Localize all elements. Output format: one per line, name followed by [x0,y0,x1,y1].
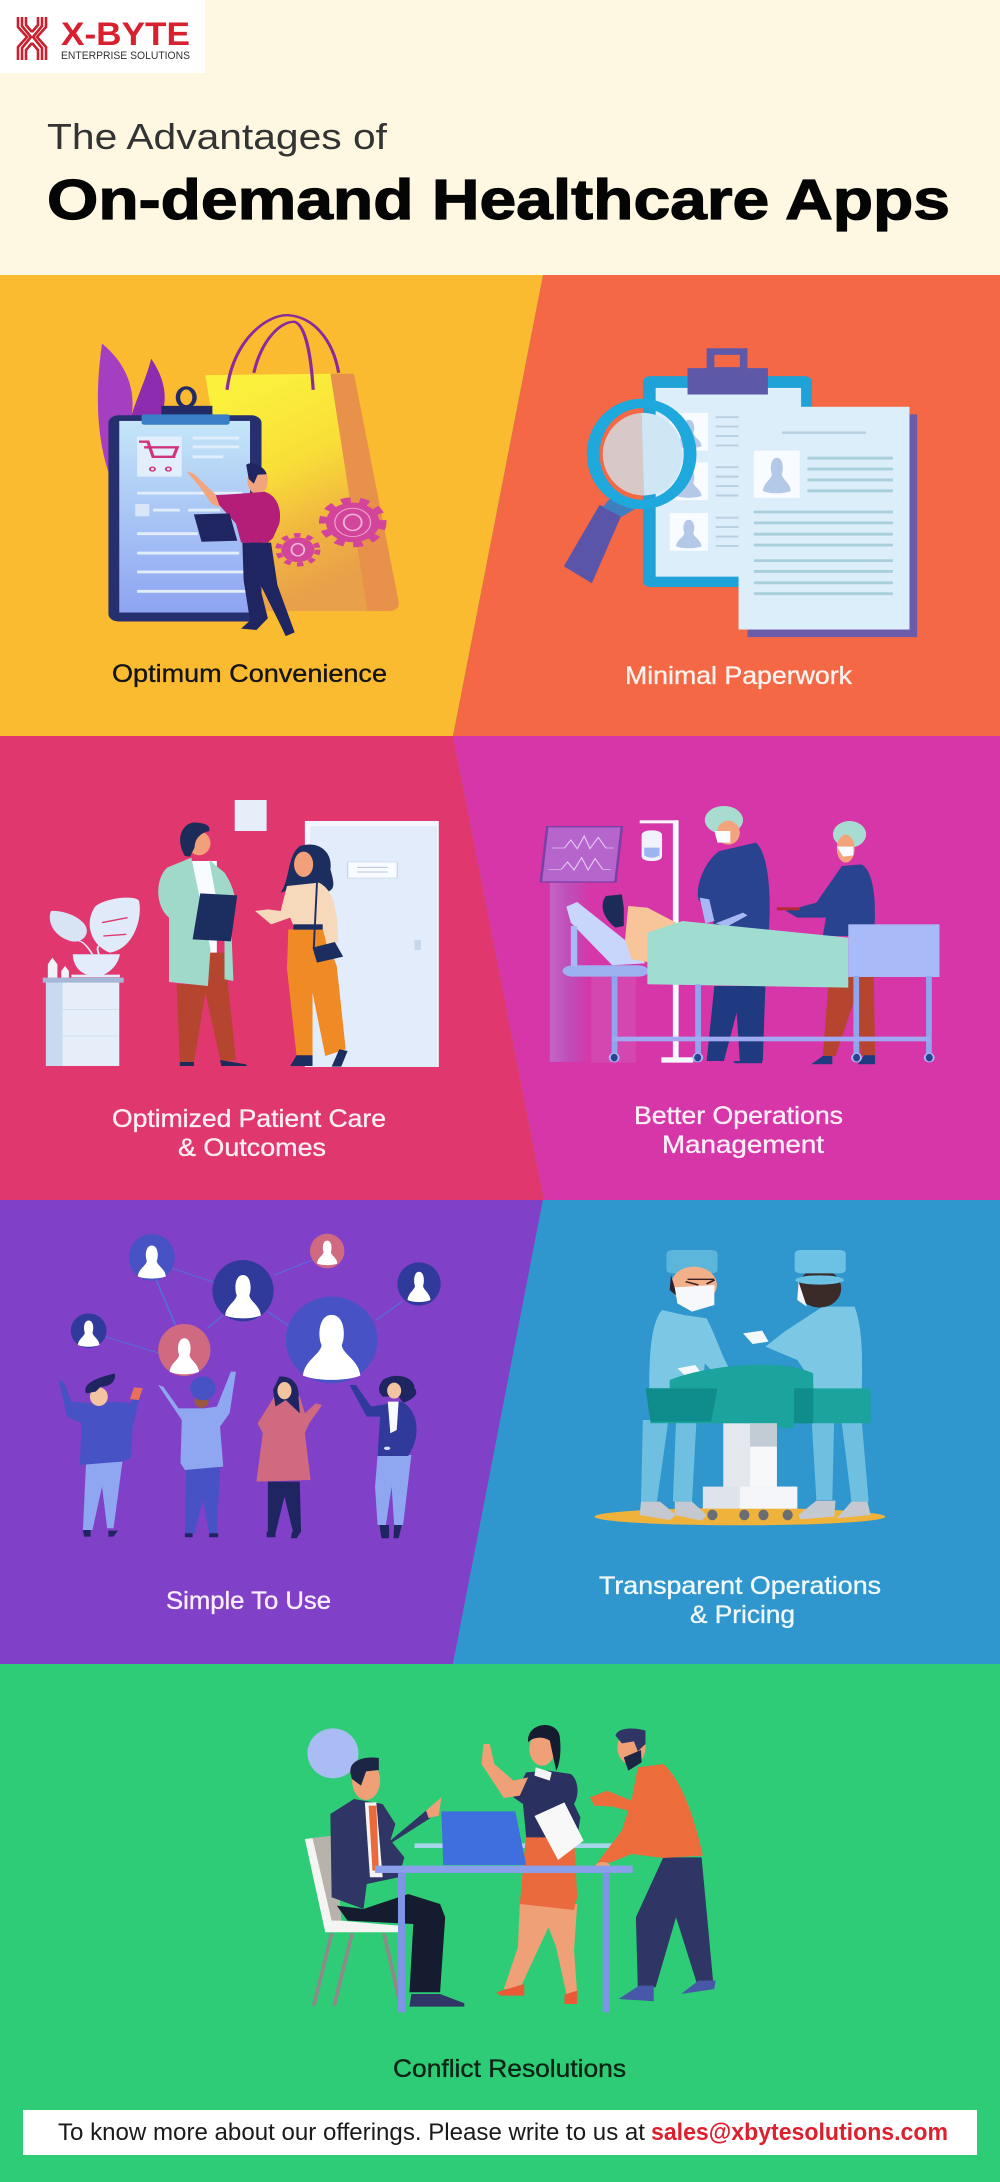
panel: conflict resolutions [0,1664,1000,2182]
table [670,1365,813,1388]
label: optimized patient care: & Outcomes [178,1134,326,1162]
illustration: doctor and patient [43,800,439,1067]
illustration: team meeting [305,1725,716,2012]
illustration: shopping bag and clipboard [98,315,399,636]
panel: better operations [453,736,1000,1200]
surgeon left [707,986,765,1061]
panel: minimal paperwork [453,275,1000,736]
seated man [337,1894,445,1992]
bearded man [636,1857,713,1987]
person 1 [83,1462,122,1530]
illustration: operating room [541,806,939,1064]
label: better operations: Management [662,1131,824,1159]
label: conflict resolutions: Conflict Resolutions [393,2055,626,2083]
bed [563,965,649,977]
label: better operations [634,1102,843,1159]
illustration: surgeons at table [594,1250,885,1525]
title [47,116,950,232]
label: transparent operations: & Pricing [690,1601,795,1629]
label: transparent operations [599,1572,881,1629]
surgeon right [823,976,875,1056]
label: transparent operations: Transparent Operations [599,1572,881,1600]
illustration: documents and magnifier [564,348,917,637]
panel: optimum convenience [0,275,543,736]
title: On-demand Healthcare Apps [47,168,950,232]
label: optimized patient care [112,1105,386,1162]
label: optimum convenience: Optimum Convenience [112,660,387,688]
logo: ENTERPRISE SOLUTIONS [61,50,190,62]
title: The Advantages of [47,116,388,157]
label: optimized patient care: Optimized Patient Care [112,1105,386,1133]
desk [375,1866,633,1873]
doctor [188,831,210,855]
woman [281,845,333,893]
panel: optimized patient care [0,736,544,1200]
contact bar: To know more about our offerings. Please write to us at [58,2119,645,2146]
illustration: people network [59,1234,441,1538]
surgeon right [811,1413,869,1502]
contact bar: sales@xbytesolutions.com [651,2119,948,2146]
person 3 [268,1482,301,1533]
label: simple to use: Simple To Use [166,1587,331,1615]
label: minimal paperwork: Minimal Paperwork [625,662,853,690]
person 4 [375,1455,411,1525]
surgeon left [641,1420,696,1502]
panel: transparent operations [453,1200,1000,1664]
label: better operations: Better Operations [634,1102,843,1130]
panel: header [0,0,1000,276]
logo: X-BYTE [61,16,190,52]
laptop [441,1811,526,1865]
person 2 [185,1467,220,1533]
logo [0,0,205,73]
contact bar [23,2110,977,2155]
woman [504,1904,577,1994]
chair [305,1836,399,1932]
panel: simple to use [0,1200,543,1664]
